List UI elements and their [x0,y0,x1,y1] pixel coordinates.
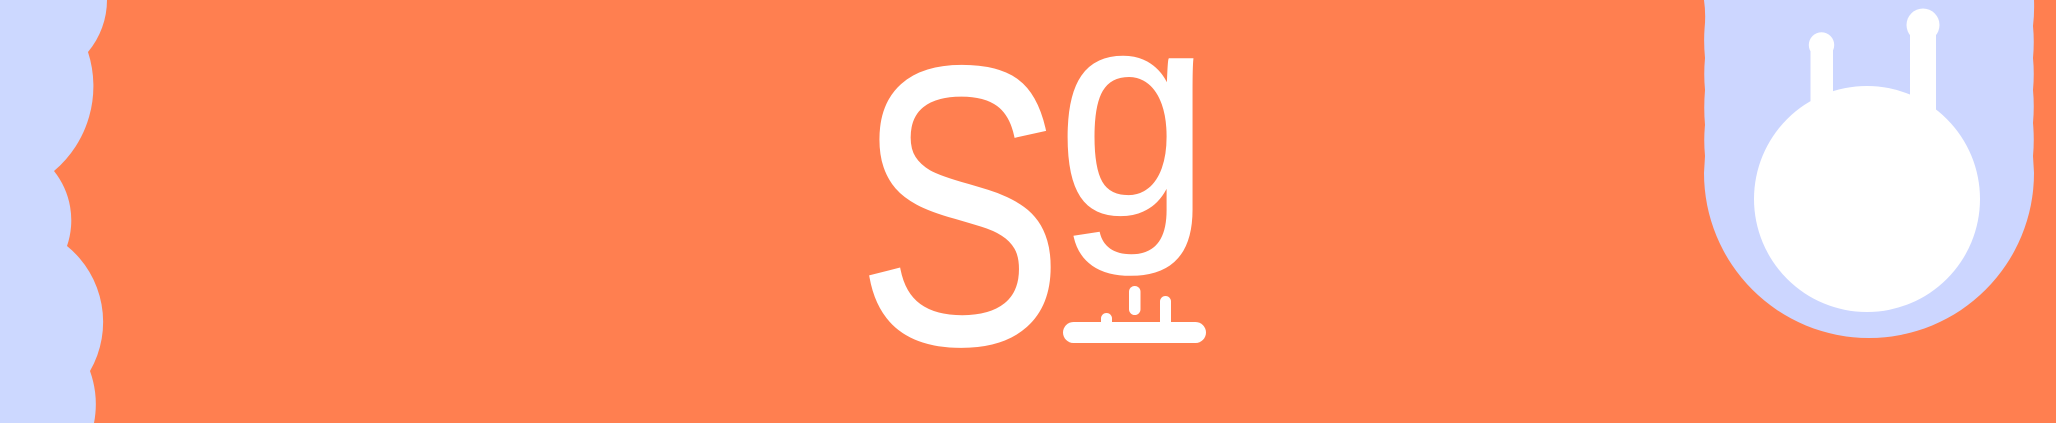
panel: hanging blue shape at right [1704,0,2034,338]
panel: scalloped left edge [0,0,107,423]
icon: bar with three ticks [1063,286,1206,343]
logo: Sg lettering [857,0,1210,423]
icon: white circle with two antennae [1754,8,1980,312]
